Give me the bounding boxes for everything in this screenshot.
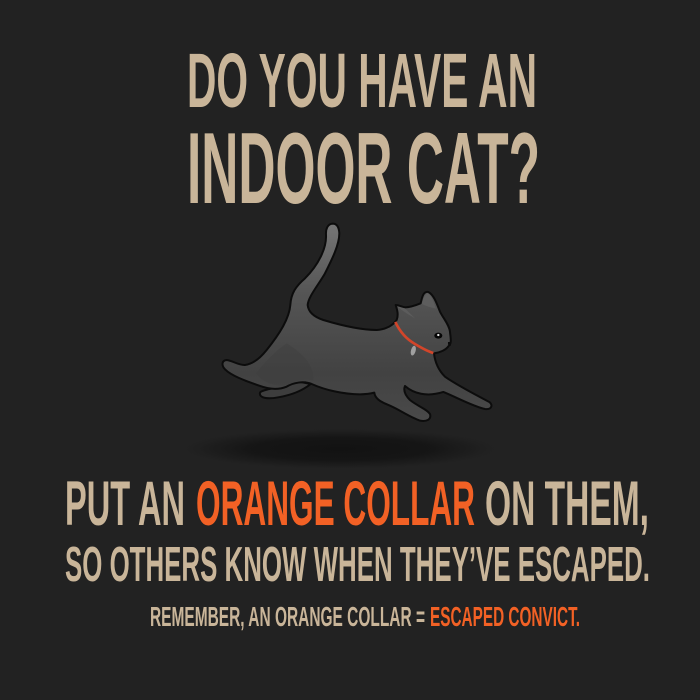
- message line 1: PUT AN: [65, 469, 185, 539]
- far hind paw: [260, 381, 311, 398]
- collar: [395, 322, 433, 353]
- shadow under cat: [175, 428, 505, 470]
- title: [187, 38, 540, 225]
- collar tag: [410, 345, 417, 356]
- nose: [448, 342, 451, 346]
- eye: [434, 333, 442, 339]
- near-body shading: [256, 343, 313, 386]
- message line 3: REMEMBER, AN ORANGE COLLAR =: [150, 601, 425, 632]
- message line 3: ESCAPED CONVICT.: [430, 601, 580, 632]
- cat body: [223, 224, 491, 421]
- cat illustration: [223, 224, 491, 421]
- inner ear: [397, 293, 436, 318]
